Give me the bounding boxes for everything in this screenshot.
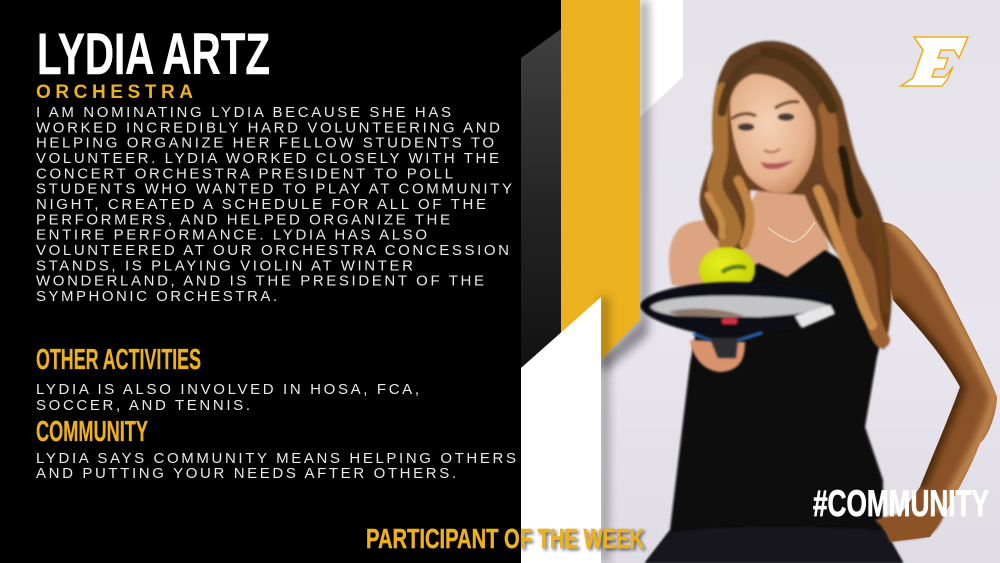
nomination text block: VOLUNTEERED AT OUR ORCHESTRA CONCESSION (36, 242, 509, 259)
nomination text block: STUDENTS WHO WANTED TO PLAY AT COMMUNITY (36, 181, 512, 198)
name title: LYDIA ARTZ (37, 22, 270, 87)
nomination text block: SYMPHONIC ORCHESTRA. (36, 288, 277, 305)
white angled panel bottom shadow (601, 297, 608, 563)
participant of the week label: PARTICIPANT OF THE WEEK (366, 523, 644, 554)
left shoulder and chest (669, 185, 830, 295)
nomination text block: WORKED INCREDIBLY HARD VOLUNTEERING AND (36, 119, 500, 136)
hand on hip (875, 512, 945, 542)
heading: other activities: OTHER ACTIVITIES (36, 344, 201, 376)
hand holding racket (690, 340, 745, 372)
tennis racket (640, 282, 838, 358)
nomination text block: CONCERT ORCHESTRA PRESIDENT TO POLL (36, 165, 453, 182)
nomination text block (36, 104, 512, 305)
subtitle: orchestra: ORCHESTRA (36, 82, 193, 103)
nomination text block: WONDERLAND, AND IS THE PRESIDENT OF THE (36, 273, 484, 290)
right arm (882, 222, 997, 542)
facial features (731, 102, 799, 169)
other activities text (36, 381, 419, 414)
school logo (901, 37, 968, 86)
black left panel (0, 0, 561, 563)
community text: LYDIA SAYS COMMUNITY MEANS HELPING OTHERS (36, 450, 516, 467)
nomination text block: VOLUNTEER. LYDIA WORKED CLOSELY WITH THE (36, 150, 499, 167)
community text (36, 450, 516, 482)
white angled panel bottom (521, 297, 601, 563)
other activities text: LYDIA IS ALSO INVOLVED IN HOSA, FCA, (36, 381, 419, 398)
other activities text: SOCCER, AND TENNIS. (36, 397, 250, 414)
nomination text block: STANDS, IS PLAYING VIOLIN AT WINTER (36, 257, 413, 274)
community text: AND PUTTING YOUR NEEDS AFTER OTHERS. (36, 465, 456, 482)
nomination text block: NIGHT, CREATED A SCHEDULE FOR ALL OF THE (36, 196, 486, 213)
nomination text block: I AM NOMINATING LYDIA BECAUSE SHE HAS (36, 104, 451, 121)
gold band (561, 0, 640, 400)
nomination text block: ENTIRE PERFORMANCE. LYDIA HAS ALSO (36, 227, 427, 244)
grey angled panel (521, 29, 561, 400)
white angled panel top (640, 0, 683, 117)
athlete photo (640, 41, 1000, 563)
heading: community: COMMUNITY (36, 416, 148, 448)
dress (645, 250, 903, 563)
photo backdrop (520, 0, 1000, 563)
skirt (645, 526, 903, 563)
hair (700, 41, 892, 350)
nomination text block: HELPING ORGANIZE HER FELLOW STUDENTS TO (36, 135, 494, 152)
face (730, 74, 816, 194)
nomination text block: PERFORMERS, AND HELPED ORGANIZE THE (36, 211, 450, 228)
tennis ball (699, 247, 755, 293)
necklace (768, 222, 815, 242)
gold band shadow (598, 0, 648, 372)
